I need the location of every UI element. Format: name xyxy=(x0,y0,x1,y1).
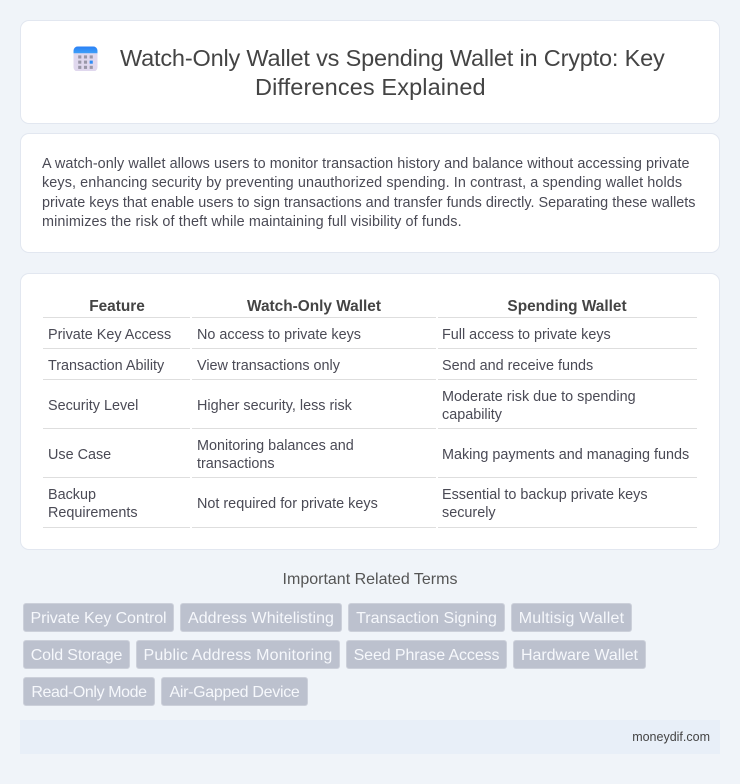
panel: title header xyxy=(20,20,720,124)
intro paragraph: A watch-only wallet allows users to monitor transaction history and balance without accessing private xyxy=(42,156,690,172)
row: private key access xyxy=(48,327,611,343)
row: backup requirements: Requirements xyxy=(48,505,138,521)
row: security level: Moderate risk due to spending xyxy=(442,389,636,405)
title: Watch-Only Wallet vs Spending Wallet in Crypto: Key xyxy=(120,45,665,71)
row: use case: transactions xyxy=(197,456,275,472)
panel: intro text xyxy=(20,133,720,253)
tag list: Air-Gapped Device xyxy=(169,684,300,701)
row: backup requirements: Essential to backup private keys xyxy=(442,487,648,503)
row: use case: Use Case xyxy=(48,447,111,463)
tag list: Seed Phrase Access xyxy=(354,647,499,664)
icon: calendar grid xyxy=(74,46,98,71)
row: private key access: Full access to private keys xyxy=(442,327,611,343)
row: backup requirements: Not required for private keys xyxy=(197,496,378,512)
table header: Feature xyxy=(89,298,145,315)
tag list: Hardware Wallet xyxy=(521,647,638,664)
row: private key access: Private Key Access xyxy=(48,327,171,343)
intro paragraph: private keys that enable users to sign transactions and transfer funds directly. Separating these wallets xyxy=(42,195,696,211)
row: security level: Security Level xyxy=(48,398,138,414)
table header xyxy=(89,298,627,315)
row: transaction ability: Transaction Ability xyxy=(48,358,164,374)
tag list: Multisig Wallet xyxy=(519,610,624,627)
panel: comparison table xyxy=(20,273,720,550)
row: use case: Monitoring balances and xyxy=(197,438,354,454)
tag list: Public Address Monitoring xyxy=(144,647,332,664)
row: security level: capability xyxy=(442,407,502,423)
row: security level: Higher security, less risk xyxy=(197,398,352,414)
tag list: Cold Storage xyxy=(31,647,122,664)
intro paragraph xyxy=(42,156,696,230)
row: use case xyxy=(48,438,689,472)
title: Differences Explained xyxy=(255,74,486,100)
heading: important related terms: Important Related Terms xyxy=(283,571,457,588)
row: backup requirements: Backup xyxy=(48,487,96,503)
title xyxy=(120,45,665,100)
intro paragraph: minimizes the risk of theft while maintaining full visibility of funds. xyxy=(42,214,462,230)
intro paragraph: keys, enhancing security by preventing unauthorized spending. In contrast, a spending wallet holds xyxy=(42,175,682,191)
row: backup requirements xyxy=(48,487,648,521)
footer bar xyxy=(20,720,720,754)
row: private key access: No access to private keys xyxy=(197,327,361,343)
tag list xyxy=(23,603,646,706)
table header: Watch-Only Wallet xyxy=(247,298,381,315)
row: backup requirements: securely xyxy=(442,505,496,521)
table header: Spending Wallet xyxy=(507,298,627,315)
row: security level xyxy=(48,389,636,423)
row: use case: Making payments and managing funds xyxy=(442,447,689,463)
tag list: Read-Only Mode xyxy=(31,684,147,701)
tag list: Address Whitelisting xyxy=(188,610,334,627)
footer source: moneydif.com xyxy=(632,730,710,744)
tag list: Private Key Control xyxy=(31,610,166,627)
row: transaction ability: View transactions only xyxy=(197,358,340,374)
row: transaction ability: Send and receive funds xyxy=(442,358,593,374)
row: transaction ability xyxy=(48,358,593,374)
tag list: Transaction Signing xyxy=(356,610,497,627)
